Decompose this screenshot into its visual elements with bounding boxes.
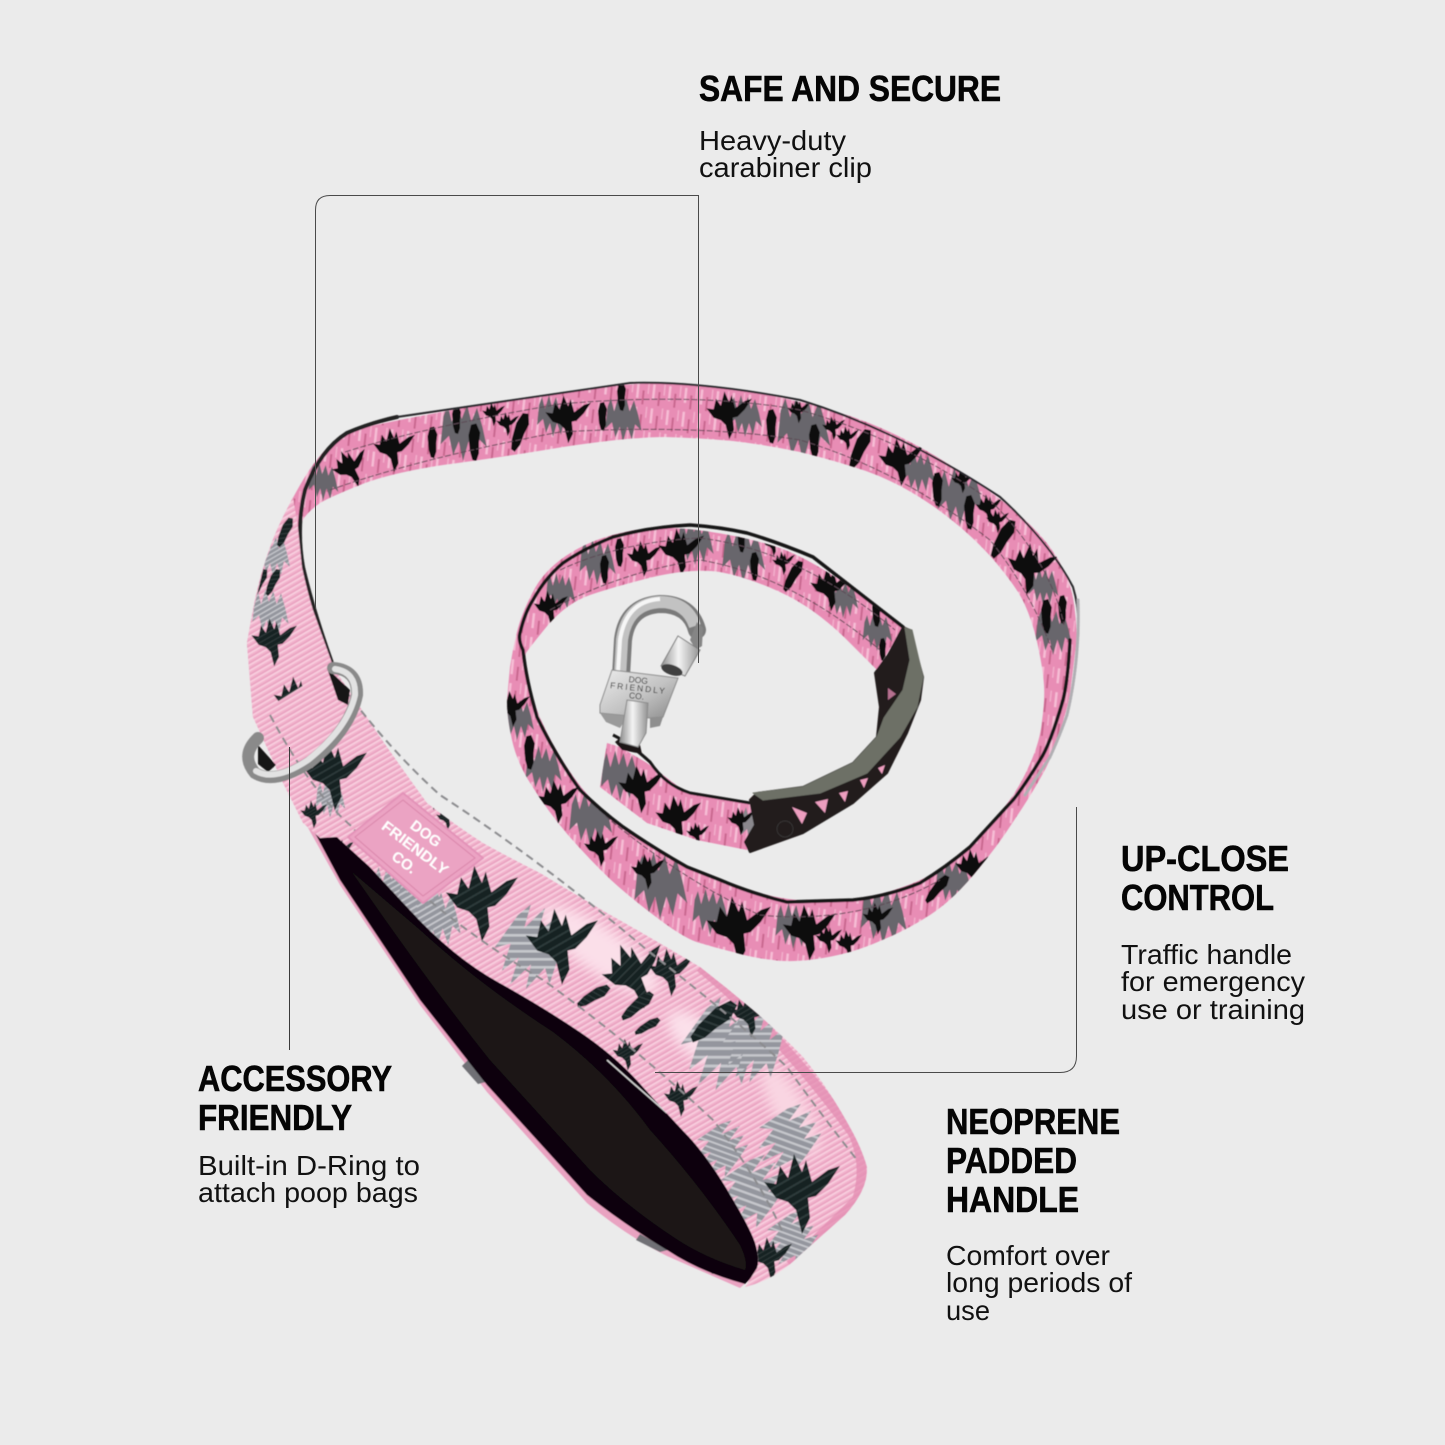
carabiner clip xyxy=(600,599,703,754)
product: pink camo leash xyxy=(247,382,1078,1288)
handle woven brand label: FRIENDLY xyxy=(378,818,451,879)
handle rear strap edge xyxy=(283,783,760,1288)
text block: safe and secure xyxy=(699,68,1001,183)
rubber traffic handle grip xyxy=(745,627,923,852)
gate sleeve xyxy=(690,622,703,650)
callout line: safe and secure xyxy=(316,196,698,663)
swivel link xyxy=(615,738,642,754)
text block: up-close control: UP-CLOSE xyxy=(1121,838,1289,879)
upper strap above D-ring xyxy=(246,499,332,717)
spiral strap camo: black marks xyxy=(327,382,1067,964)
handle stitching xyxy=(270,690,857,1233)
text block: accessory friendly: attach poop bags xyxy=(198,1177,418,1208)
spiral strap stitching xyxy=(330,399,1064,917)
handle woven brand label xyxy=(348,793,483,903)
strap end at clip xyxy=(600,735,774,850)
neoprene padded interior xyxy=(308,820,758,1284)
text block: neoprene padded handle: PADDED xyxy=(946,1140,1077,1181)
text block: safe and secure: SAFE AND SECURE xyxy=(699,68,1001,109)
text block: safe and secure: Heavy-duty xyxy=(699,125,846,156)
text block: neoprene padded handle: NEOPRENE xyxy=(946,1101,1120,1142)
handle woven brand label: DOG xyxy=(407,817,444,851)
text block: up-close control: use or training xyxy=(1121,994,1305,1025)
text block: neoprene padded handle: long periods of xyxy=(946,1267,1132,1298)
brand plate xyxy=(600,670,678,718)
front of padded handle xyxy=(253,667,867,1287)
rear strap grey camo flecks xyxy=(462,1060,722,1274)
handle light and shade patches xyxy=(530,892,862,1265)
spiral strap camo: grey patches xyxy=(309,395,1072,949)
text block: neoprene padded handle: use xyxy=(946,1295,990,1326)
text block: up-close control: Traffic handle xyxy=(1121,939,1292,970)
handle camo: grey patches xyxy=(316,780,834,1276)
text block: accessory friendly: ACCESSORY xyxy=(198,1058,392,1099)
text block: up-close control: for emergency xyxy=(1121,966,1305,997)
text block: neoprene padded handle xyxy=(946,1101,1132,1326)
text block: accessory friendly xyxy=(198,1058,420,1208)
text block: neoprene padded handle: HANDLE xyxy=(946,1179,1079,1220)
handle woven brand label: CO. xyxy=(388,848,420,878)
D-ring xyxy=(248,668,357,777)
spiral strap xyxy=(247,383,1076,961)
text block: neoprene padded handle: Comfort over xyxy=(946,1240,1110,1271)
handle camo: dark marks xyxy=(300,742,840,1281)
carabiner clip: DOG xyxy=(628,674,648,686)
carabiner clip: FRIENDLY xyxy=(610,680,666,696)
text block: up-close control: CONTROL xyxy=(1121,877,1274,918)
text block: safe and secure: carabiner clip xyxy=(699,152,872,183)
spiral strap dark rim xyxy=(300,383,1078,902)
callout line: neoprene padded handle xyxy=(655,807,1076,1072)
carabiner clip: CO. xyxy=(629,690,645,702)
text block: accessory friendly: FRIENDLY xyxy=(198,1097,352,1138)
text block: up-close control xyxy=(1121,838,1305,1025)
hook xyxy=(621,604,697,676)
text block: accessory friendly: Built-in D-Ring to xyxy=(198,1150,420,1181)
callout line: accessory friendly xyxy=(288,747,290,1050)
